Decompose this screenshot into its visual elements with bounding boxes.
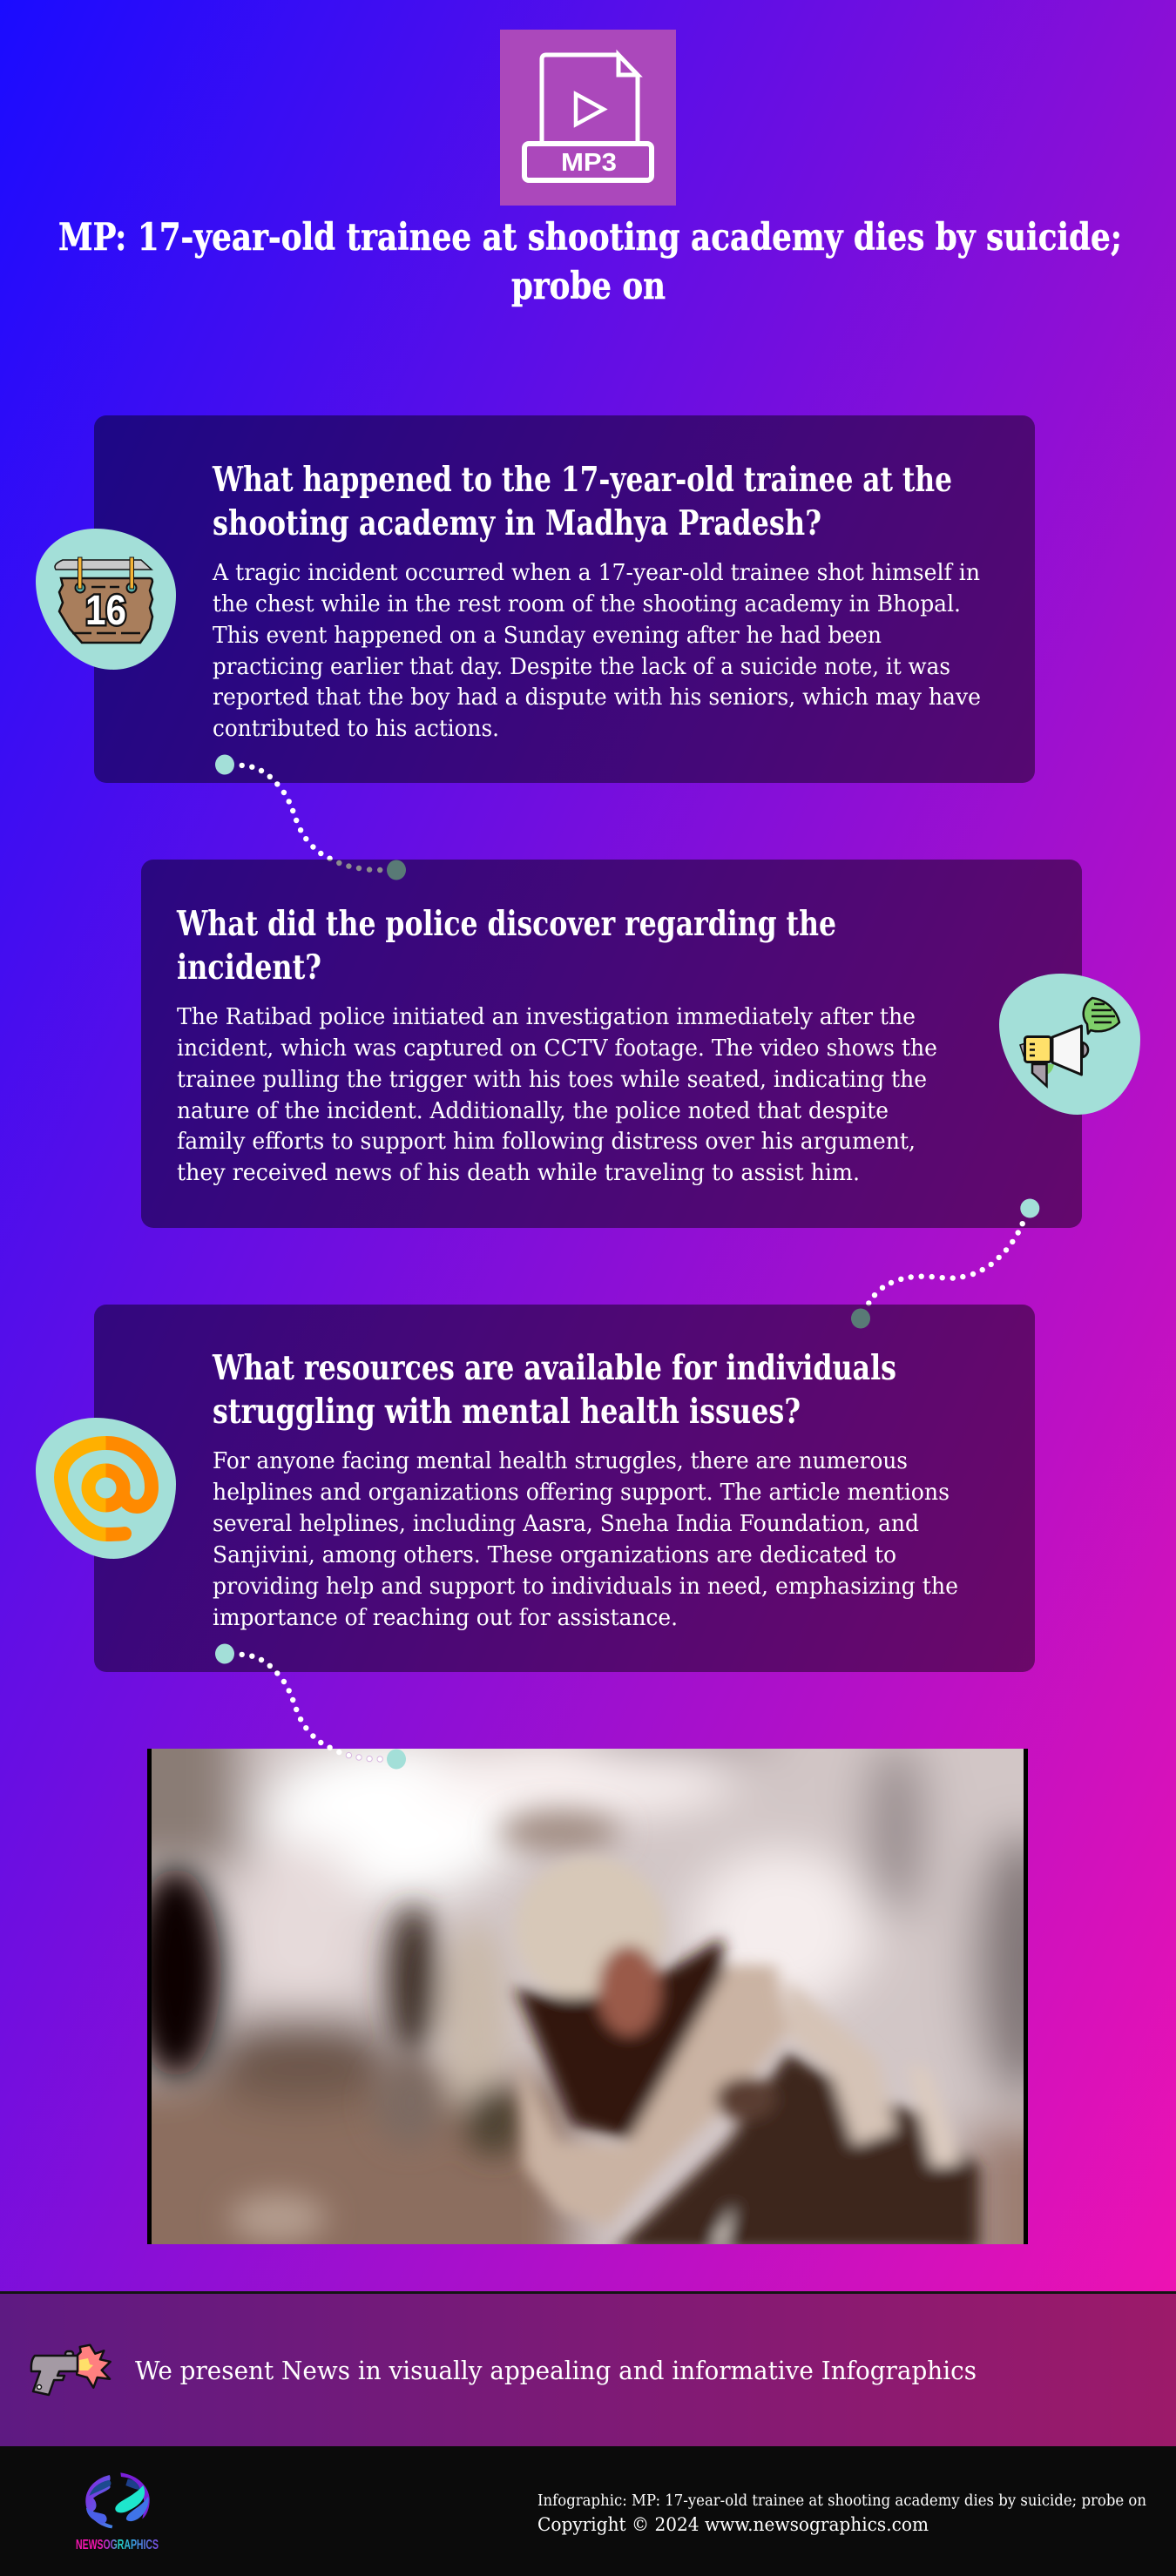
title [58, 216, 1122, 308]
heading: card 3: struggling with mental health issues? [213, 1392, 801, 1432]
photo: blurred hand [147, 1749, 1028, 2244]
text block: card 2: nature of the incident. Additionally, the police noted that despite [177, 1098, 889, 1124]
connector: card 3 to photo [215, 1644, 406, 1770]
text block: card 1 [212, 560, 981, 742]
title: probe on [511, 265, 666, 308]
text block: card 3: Sanjivini, among others. These organizations are dedicated to [213, 1542, 896, 1568]
text block: card 3 [213, 1448, 958, 1631]
heading: card 1: What happened to the 17-year-old trainee at the [212, 460, 952, 500]
heading: card 1: shooting academy in Madhya Pradesh? [213, 503, 821, 543]
heading: card 2: incident? [177, 947, 321, 988]
icon: mp3 file [500, 30, 676, 206]
connector: card 1 to card 2 [215, 754, 406, 880]
text block: card 1: the chest while in the rest room of the shooting academy in Bhopal. [213, 591, 961, 617]
text block: card 3: helplines and organizations offering support. The article mentions [213, 1480, 950, 1506]
icon: megaphone [999, 974, 1140, 1115]
copyright: Copyright © 2024 www.newsographics.com [537, 2514, 929, 2535]
text block: card 3: importance of reaching out for assistance. [213, 1605, 678, 1631]
text block: card 1: reported that the boy had a dispute with his seniors, which may have [213, 684, 981, 711]
icon: at sign [36, 1418, 176, 1559]
logo: newsographics [76, 2472, 159, 2552]
icon: calendar sign 16: 16 [85, 588, 126, 634]
text block: card 3: several helplines, including Aasra, Sneha India Foundation, and [213, 1511, 919, 1537]
text block: card 3: providing help and support to individuals in need, emphasizing the [213, 1574, 958, 1600]
text block: card 3: For anyone facing mental health struggles, there are numerous [213, 1448, 908, 1474]
text block: card 2: The Ratibad police initiated an investigation immediately after the [177, 1004, 916, 1030]
tagline band [0, 2291, 1176, 2446]
text block: card 1: practicing earlier that day. Despite the lack of a suicide note, it was [213, 654, 950, 680]
icon: mp3 file: MP3 [561, 149, 617, 177]
tagline text: We present News in visually appealing and informative Infographics [135, 2356, 977, 2385]
text block: card 1: This event happened on a Sunday evening after he had been [213, 623, 882, 649]
heading: card 2 [176, 904, 836, 988]
text block: card 1: contributed to his actions. [213, 716, 499, 742]
footer [0, 2446, 1176, 2576]
heading: card 1 [212, 460, 952, 543]
text block: card 2: incident, which was captured on CCTV footage. The video shows the [177, 1035, 937, 1062]
panel: card 2 [141, 860, 1082, 1228]
text block: card 1: A tragic incident occurred when a 17-year-old trainee shot himself in [212, 560, 980, 586]
heading: card 3: What resources are available for individuals [212, 1348, 896, 1388]
panel: card 1 [94, 415, 1035, 783]
text block: card 2: they received news of his death while traveling to assist him. [177, 1160, 860, 1186]
logo: newsographics: NEWSOGRAPHICS [76, 2538, 159, 2552]
source credit: Infographic: MP: 17-year-old trainee at shooting academy dies by suicide; probe on [537, 2492, 1146, 2510]
text block: card 2: trainee pulling the trigger with his toes while seated, indicating the [177, 1067, 927, 1093]
heading: card 2: What did the police discover regarding the [176, 904, 836, 944]
text block: card 2 [177, 1004, 937, 1186]
icon: gun firing [31, 2345, 111, 2395]
panel: card 3 [94, 1305, 1035, 1672]
heading: card 3 [212, 1348, 896, 1432]
text block: card 2: family efforts to support him following distress over his argument, [177, 1129, 916, 1155]
connector: card 2 to card 3 [851, 1198, 1039, 1329]
icon: calendar sign 16 [36, 529, 176, 670]
